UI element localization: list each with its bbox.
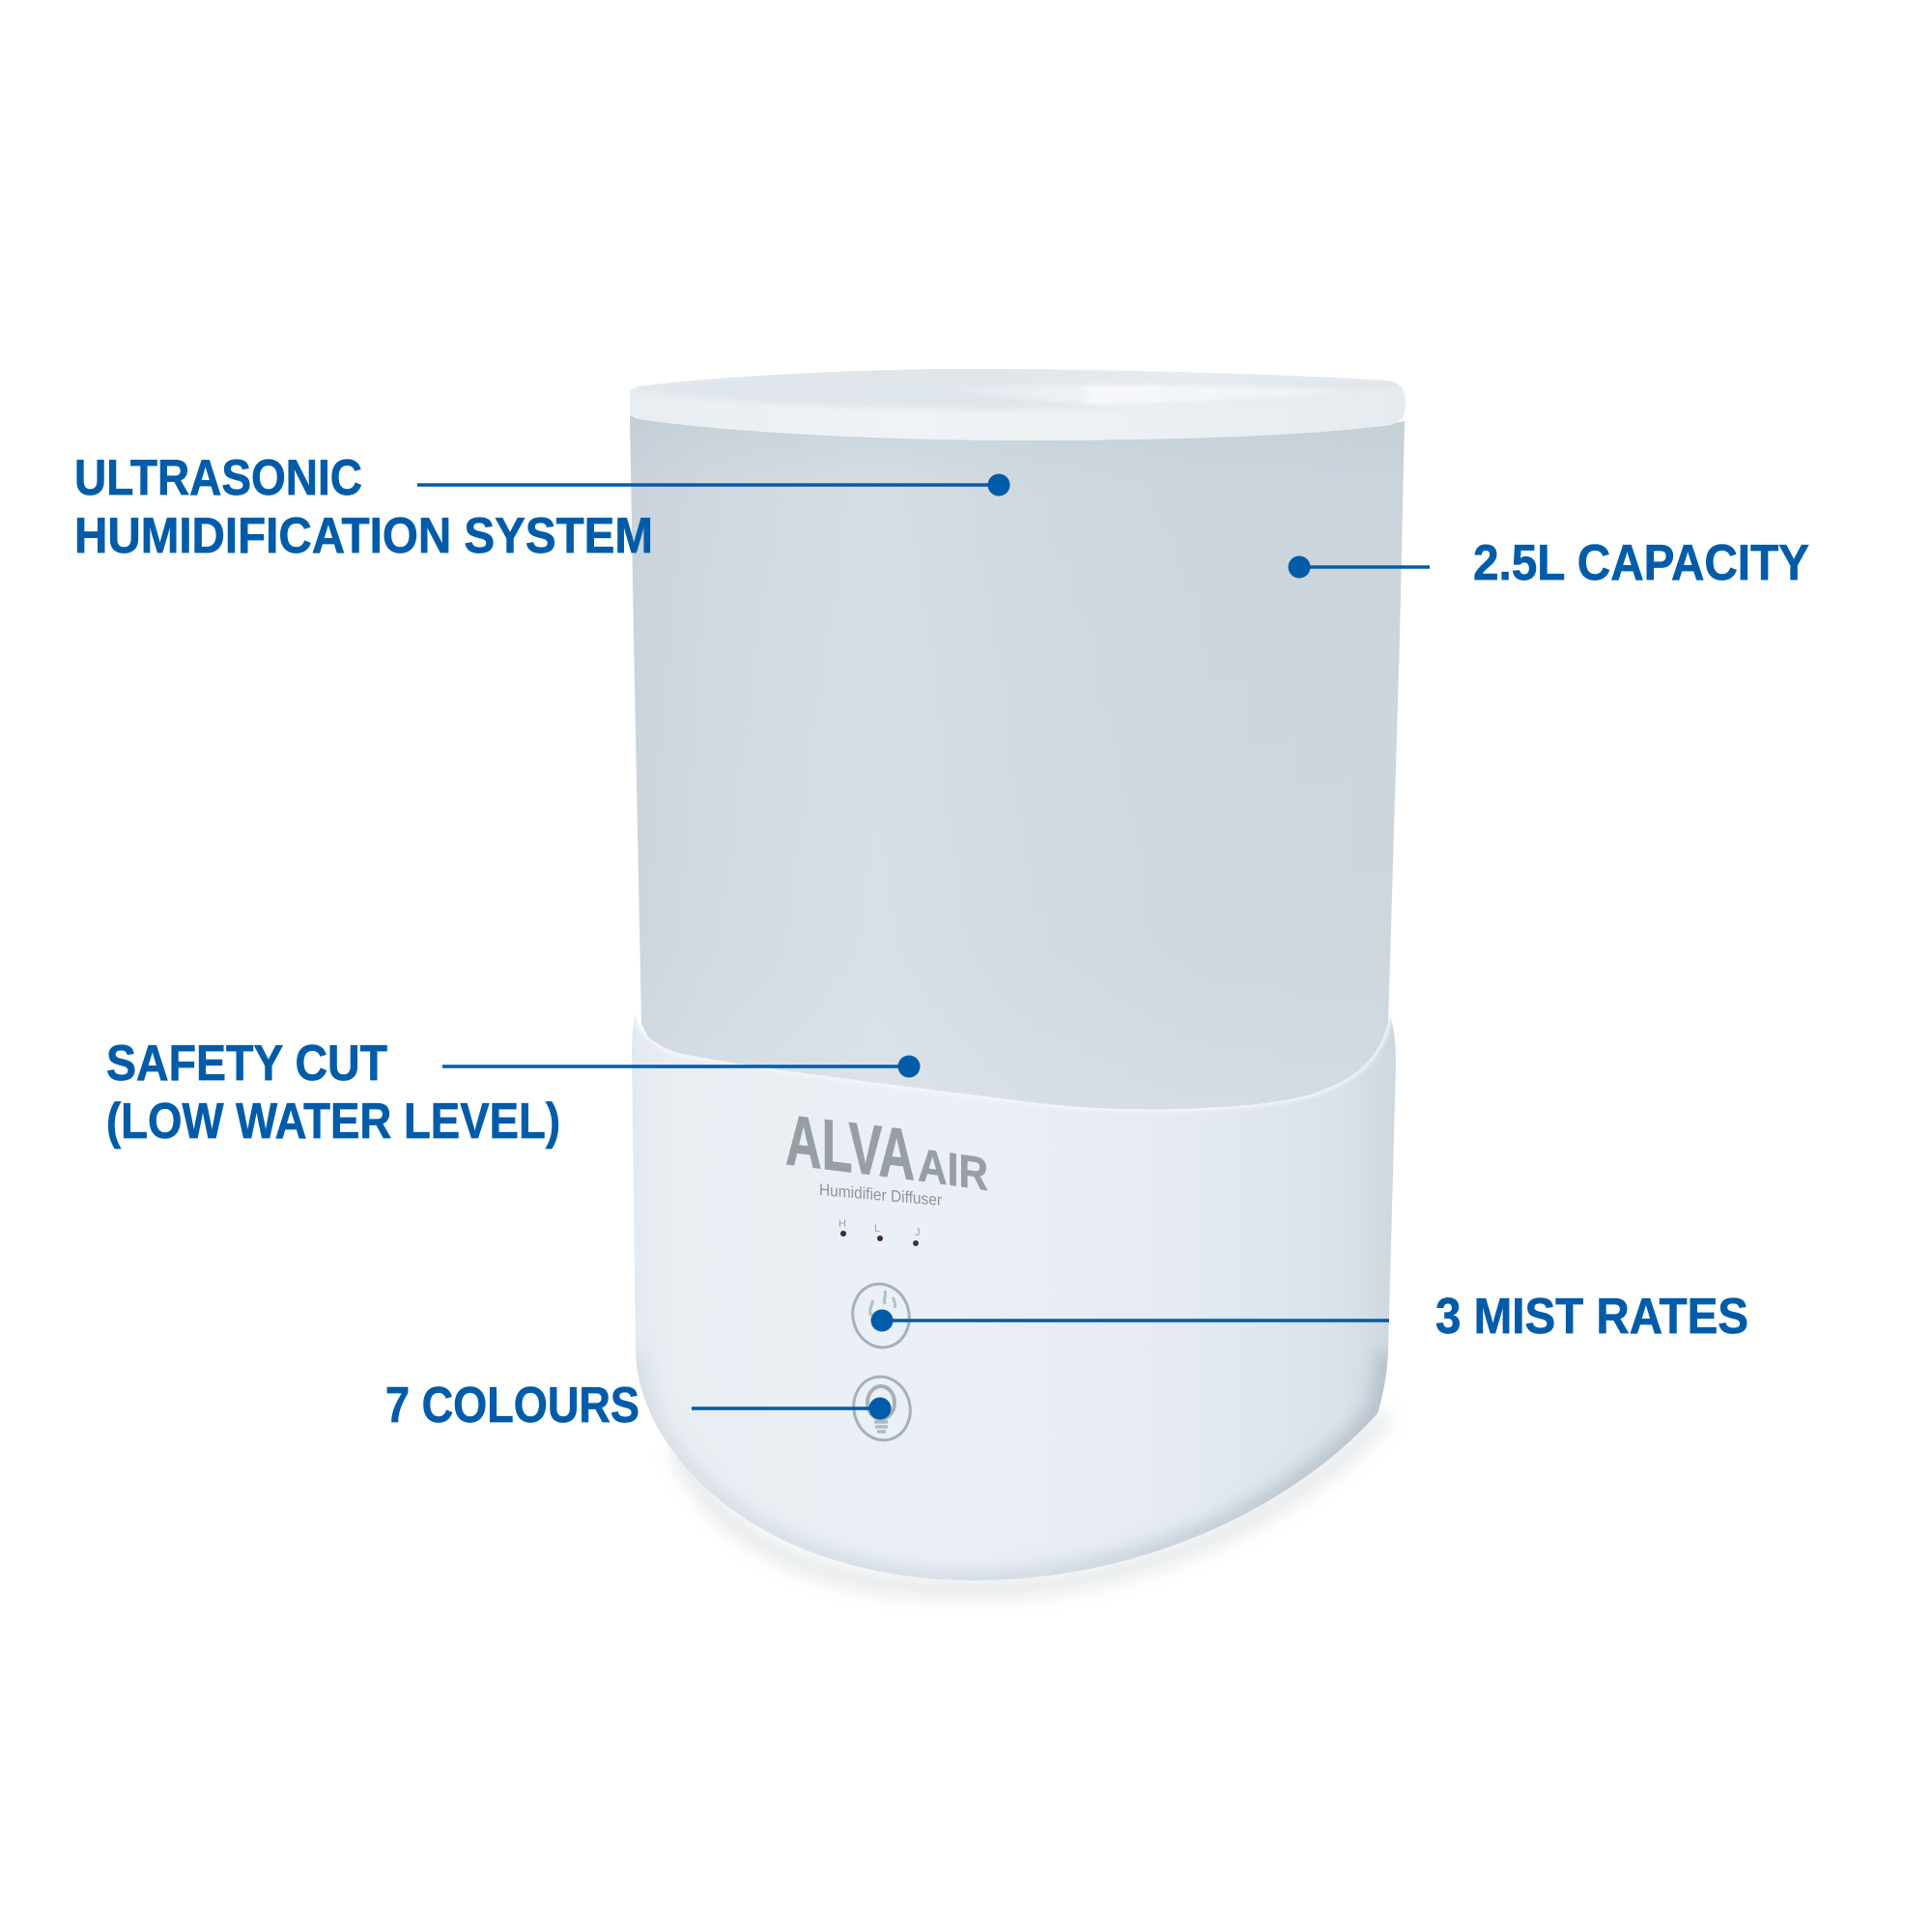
brand logo: ALVA AIR: AIR [918, 1139, 988, 1201]
lid [618, 365, 1410, 440]
callout: safety cut [106, 1036, 920, 1150]
indicator lights: L [874, 1223, 880, 1235]
humidifier product [618, 365, 1410, 1589]
callout: 3 mist rates: 3 MIST RATES [1435, 1289, 1748, 1345]
callout: safety cut: SAFETY CUT [106, 1036, 387, 1092]
callout: ultrasonic humidification system: ULTRASONIC [74, 450, 362, 506]
callout: 7 colours: 7 COLOURS [385, 1378, 639, 1434]
callout: safety cut: (LOW WATER LEVEL) [106, 1094, 560, 1150]
callout: 2.5L capacity: 2.5L CAPACITY [1473, 535, 1809, 591]
callout: ultrasonic humidification system: HUMIDIFICATION SYSTEM [74, 508, 653, 564]
colour button icon [847, 1371, 917, 1446]
water tank [630, 415, 1405, 1121]
callout: ultrasonic humidification system [74, 450, 1010, 564]
indicator lights: J [915, 1227, 920, 1238]
indicator lights [838, 1218, 920, 1246]
callout: 2.5L capacity [1289, 535, 1809, 591]
indicator lights: H [838, 1218, 846, 1230]
brand logo: ALVA AIR: Humidifier Diffuser [819, 1180, 942, 1209]
callout: 3 mist rates [871, 1289, 1748, 1345]
mist button icon [846, 1278, 916, 1353]
base [632, 1014, 1396, 1580]
callout: 7 colours [385, 1378, 891, 1434]
brand logo: ALVA AIR: ALVA [785, 1099, 915, 1195]
soft floor shadow [676, 1415, 1386, 1589]
